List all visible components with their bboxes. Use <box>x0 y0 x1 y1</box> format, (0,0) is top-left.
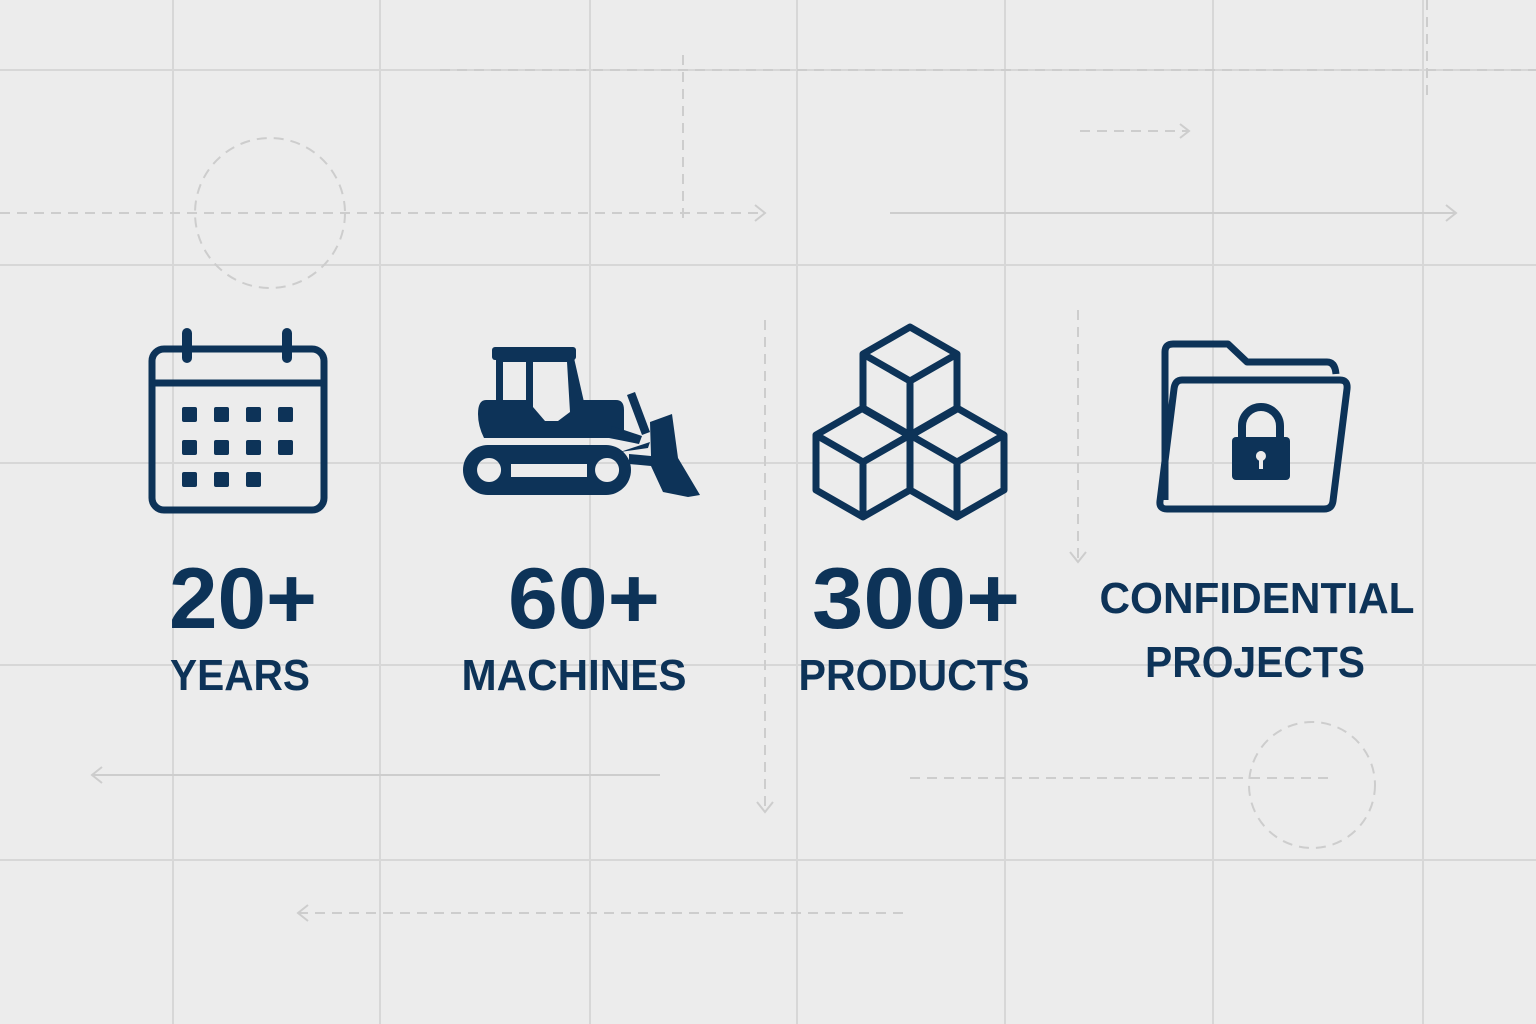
stat: years <box>169 551 317 700</box>
stat: products: PRODUCTS <box>798 651 1030 700</box>
stat: years: YEARS <box>170 651 310 700</box>
icon: bulldozer <box>463 347 700 497</box>
stat: confidential projects: CONFIDENTIAL <box>1100 574 1414 623</box>
icon: folder with lock <box>1160 344 1347 509</box>
icon: calendar <box>152 333 324 510</box>
stat: years: 20+ <box>169 551 317 647</box>
stat: confidential projects <box>1100 574 1414 687</box>
stat: products: 300+ <box>812 551 1020 647</box>
stat: products <box>798 551 1030 700</box>
stat: machines <box>462 551 686 700</box>
stat: confidential projects: PROJECTS <box>1145 638 1365 687</box>
stat: machines: MACHINES <box>462 651 686 700</box>
icon: cubes <box>816 327 1004 517</box>
stat: machines: 60+ <box>508 551 660 647</box>
